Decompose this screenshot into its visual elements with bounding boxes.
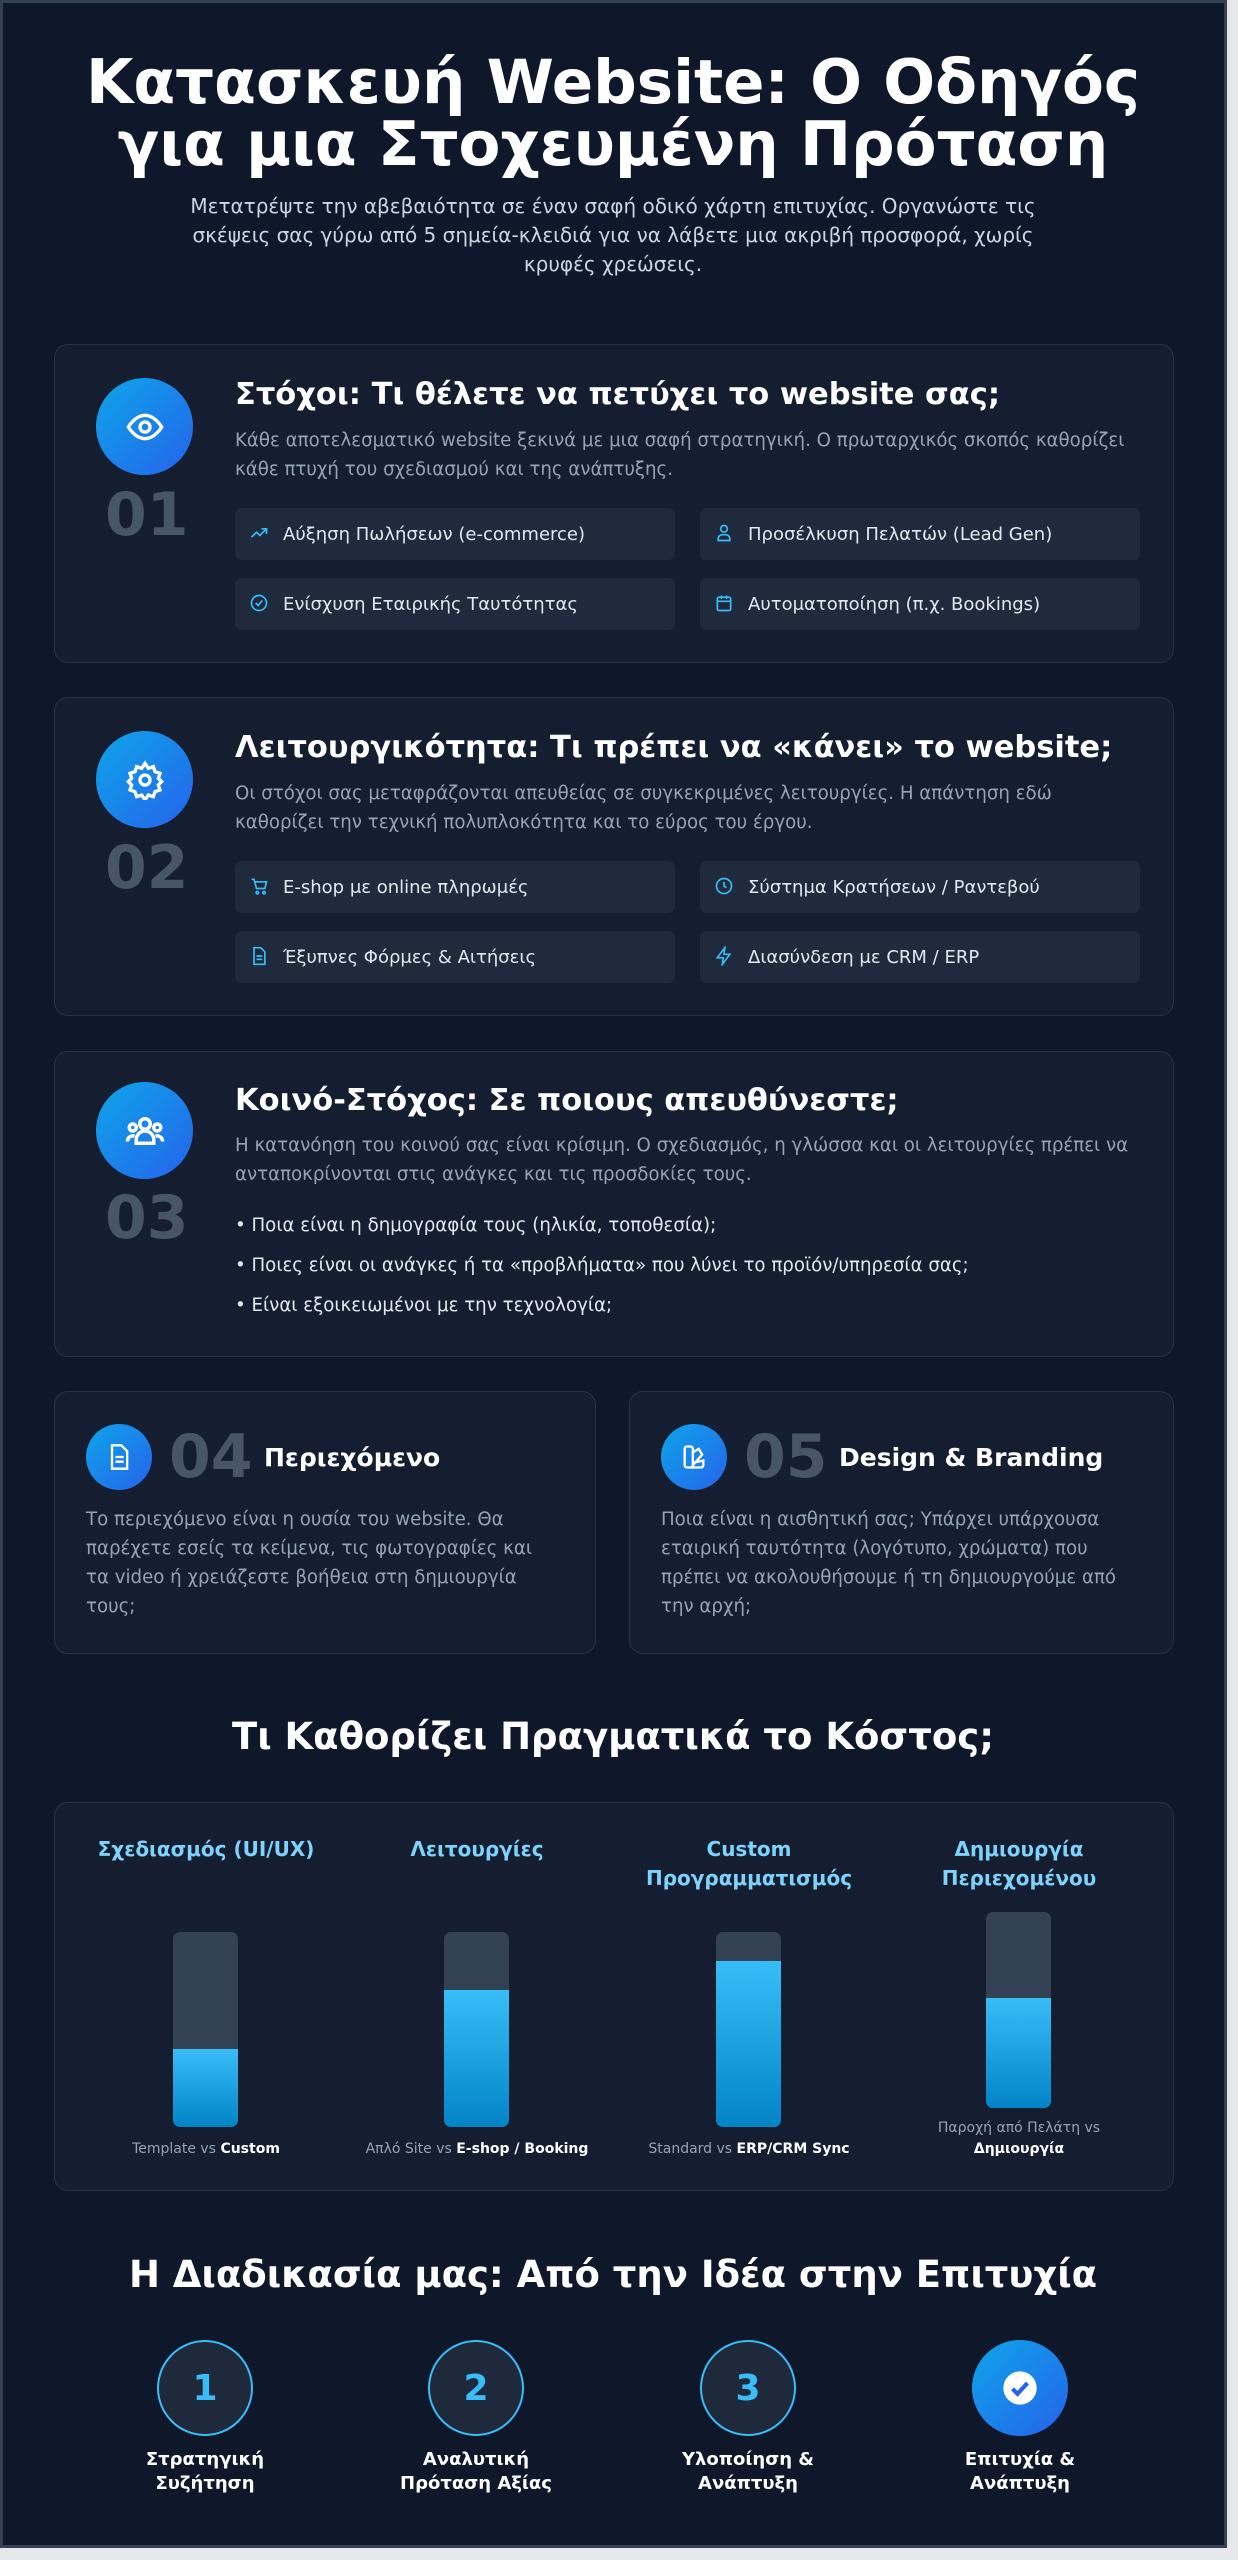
description: Η κατανόηση του κοινού σας είναι κρίσιμη. Ο σχεδιασμός, η γλώσσα και οι λειτουργίες πρέπει να ανταποκρίνονται στις ανάγκες και τις προσδοκίες τους. — [235, 1135, 1128, 1185]
title: για μια Στοχευμένη Πρόταση — [118, 109, 1108, 180]
step 3: Ανάπτυξη — [698, 2473, 798, 2494]
step 2: 2 — [463, 2368, 489, 2408]
column: custom dev: Standard vs ERP/CRM Sync — [648, 2141, 850, 2157]
number 03: 03 — [105, 1183, 188, 1253]
process steps — [146, 2340, 1075, 2494]
chip — [235, 931, 675, 983]
description: Οι στόχοι σας μεταφράζονται απευθείας σε συγκεκριμένες λειτουργίες. Η απάντηση εδώ καθορίζει την τεχνική πολυπλοκότητα και το εύρος του έργου. — [235, 783, 1052, 833]
step 2: Πρόταση Αξίας — [400, 2473, 552, 2494]
panel: 03 audience — [54, 1051, 1174, 1357]
column: content creation: Παροχή από Πελάτη vs — [938, 2120, 1100, 2136]
heading: Περιεχόμενο — [264, 1443, 440, 1472]
column: content creation: Δημιουργία — [974, 2141, 1064, 2157]
step 1: Συζήτηση — [155, 2473, 255, 2494]
panel: 02 functionality — [54, 697, 1174, 1016]
chip: Προσέλκυση Πελατών (Lead Gen) — [748, 524, 1052, 544]
step 2: Αναλυτική — [423, 2449, 529, 2470]
step 4: success: Επιτυχία & — [965, 2449, 1075, 2470]
chip — [235, 508, 675, 560]
panel: 04 content — [54, 1391, 596, 1654]
bar chart: cost factors — [54, 1802, 1174, 2191]
text: Ποια είναι η αισθητική σας; Υπάρχει υπάρχουσα εταιρική ταυτότητα (λογότυπο, χρώματα) που πρέπει να ακολουθήσουμε ή τη δημιουργούμε από την αρχή; — [661, 1509, 1116, 1617]
step 3: Υλοποίηση & — [682, 2449, 814, 2470]
bullet list: • Ποια είναι η δημογραφία τους (ηλικία, τοποθεσία); — [235, 1215, 716, 1236]
heading: cost: Τι Καθορίζει Πραγματικά το Κόστος; — [232, 1715, 994, 1758]
column: content creation: Περιεχομένου — [942, 1866, 1096, 1890]
step 3: 3 — [735, 2368, 761, 2408]
icon: users — [96, 1082, 193, 1179]
heading: process: Η Διαδικασία μας: Από την Ιδέα στην Επιτυχία — [129, 2253, 1097, 2296]
column: custom dev — [646, 1837, 852, 2157]
column: design: Template vs Custom — [132, 2141, 280, 2157]
step 1: 1 — [192, 2368, 218, 2408]
column: design — [98, 1837, 314, 2157]
number 04: 04 — [169, 1422, 252, 1492]
step 1: Στρατηγική — [146, 2449, 264, 2470]
column: features: Λειτουργίες — [410, 1837, 544, 1861]
column: design: Σχεδιασμός (UI/UX) — [98, 1837, 314, 1861]
title: Κατασκευή Website: Ο Οδηγός — [86, 47, 1140, 118]
panel: 01 goals — [54, 344, 1174, 663]
heading: Design & Branding — [839, 1443, 1103, 1472]
icon: palette — [661, 1424, 727, 1490]
chip: Διασύνδεση με CRM / ERP — [748, 946, 979, 968]
chip: E-shop με online πληρωμές — [283, 876, 528, 898]
bullet list: • Ποιες είναι οι ανάγκες ή τα «προβλήματα» που λύνει το προϊόν/υπηρεσία σας; — [235, 1255, 969, 1276]
bullet list — [235, 1215, 969, 1316]
subtitle: Μετατρέψτε την αβεβαιότητα σε έναν σαφή οδικό χάρτη επιτυχίας. Οργανώστε τις σκέψεις σας γύρω από 5 σημεία-κλειδιά για να λάβετε μια ακριβή προσφορά, χωρίς κρυφές χρεώσεις. — [190, 194, 1036, 276]
title — [86, 47, 1140, 180]
chip — [700, 578, 1140, 630]
chip — [700, 508, 1140, 560]
step 3 — [682, 2340, 814, 2494]
heading: Λειτουργικότητα: Τι πρέπει να «κάνει» το website; — [235, 730, 1112, 765]
column: custom dev: Προγραμματισμός — [646, 1866, 852, 1890]
number 01: 01 — [105, 480, 188, 550]
number 02: 02 — [105, 833, 188, 903]
bullet list: • Είναι εξοικειωμένοι με την τεχνολογία; — [235, 1295, 612, 1316]
text: Το περιεχόμενο είναι η ουσία του website. Θα παρέχετε εσείς τα κείμενα, τις φωτογραφίες και τα video ή χρειάζεστε βοήθεια στη δημιουργία τους; — [86, 1509, 532, 1617]
column: features — [366, 1837, 588, 2157]
step 2 — [400, 2340, 552, 2494]
column: custom dev: Custom — [707, 1837, 791, 1861]
column: content creation — [938, 1837, 1100, 2157]
icon: eye — [96, 378, 193, 475]
chip — [235, 578, 675, 630]
panel: 05 design — [629, 1391, 1174, 1654]
chip: Σύστημα Κρατήσεων / Ραντεβού — [748, 876, 1040, 898]
step 1 — [146, 2340, 264, 2494]
step 4: success: Ανάπτυξη — [970, 2473, 1070, 2494]
chip: Αύξηση Πωλήσεων (e-commerce) — [283, 524, 585, 544]
chip: Έξυπνες Φόρμες & Αιτήσεις — [283, 946, 536, 968]
chip: Ενίσχυση Εταιρικής Ταυτότητας — [283, 594, 578, 614]
heading: Κοινό-Στόχος: Σε ποιους απευθύνεστε; — [235, 1083, 899, 1118]
chip — [700, 861, 1140, 913]
heading: Στόχοι: Τι θέλετε να πετύχει το website σας; — [235, 377, 1000, 412]
number 05: 05 — [744, 1422, 828, 1492]
icon: gear — [96, 731, 193, 828]
description: Κάθε αποτελεσματικό website ξεκινά με μια σαφή στρατηγική. Ο πρωταρχικός σκοπός καθορίζει κάθε πτυχή του σχεδιασμού και της ανάπτυξης. — [235, 430, 1124, 480]
chip — [235, 861, 675, 913]
icon: document — [86, 1424, 152, 1490]
step 4: success — [965, 2340, 1075, 2494]
column: features: Απλό Site vs E-shop / Booking — [366, 2141, 588, 2157]
chip — [700, 931, 1140, 983]
chip: Αυτοματοποίηση (π.χ. Bookings) — [748, 594, 1040, 614]
column: content creation: Δημιουργία — [955, 1837, 1083, 1861]
